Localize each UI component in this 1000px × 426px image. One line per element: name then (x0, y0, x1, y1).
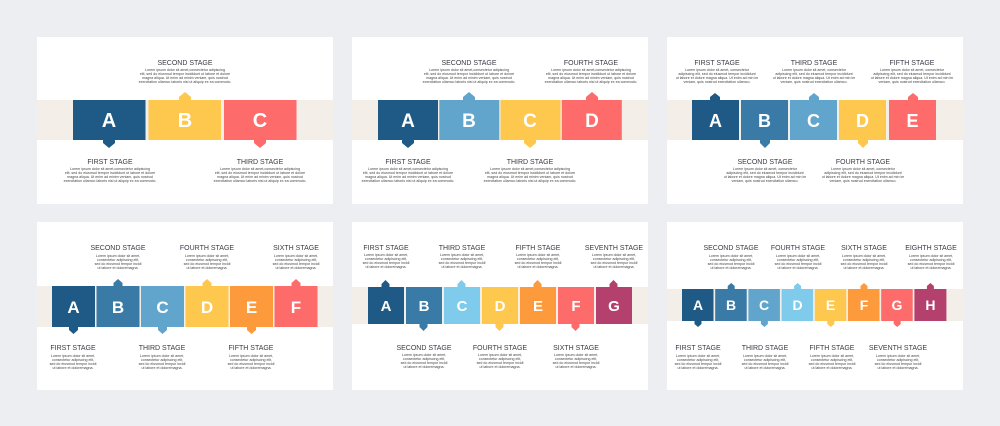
text: first stage: consectetur adipiscing elit, (52, 358, 94, 362)
text: fifth stage: adipiscing elit, sed do eiusmod tempor incididunt (873, 72, 951, 76)
text: seventh stage: sed do eiusmod tempor incidi (875, 362, 922, 366)
text: fifth stage: FIFTH STAGE (229, 345, 274, 352)
text: third stage: Lorem ipsum dolor sit amet,consectetur adipiscing (490, 167, 570, 171)
text: second stage (703, 245, 759, 270)
text: second stage: SECOND STAGE (441, 60, 497, 67)
text: first stage: Lorem ipsum dolor sit amet,consectetur adipiscing (70, 167, 150, 171)
stage D box: D (495, 298, 506, 315)
text: first stage (676, 60, 758, 84)
text: seventh stage: consectetur adipiscing elit, (593, 257, 635, 261)
stage G box (596, 280, 632, 324)
text: first stage: Lorem ipsum dolor sit amet, consectetur (685, 68, 750, 72)
text: second stage: sed do eiusmod tempor incidi (95, 262, 142, 266)
text: fifth stage (871, 60, 953, 84)
stage F box (558, 287, 594, 331)
text: fourth stage (473, 345, 527, 369)
text: second stage: consectetur adipiscing elit, (403, 357, 445, 361)
text: eighth stage: ut labore et doloremagna. (911, 266, 951, 270)
text: second stage: adipiscing elit, sed do eiusmod tempor incididunt (726, 171, 804, 175)
text: third stage: THIRD STAGE (507, 159, 554, 166)
stage A box: A (401, 111, 415, 132)
stage A box: A (709, 111, 722, 131)
text: first stage: sed do eiusmod tempor incidi (50, 362, 97, 366)
panel: 4 stages (352, 37, 648, 204)
text: fourth stage: ut labore et doloremagna. (187, 266, 227, 270)
text: second stage: sed do eiusmod tempor incidi (401, 361, 448, 365)
text: fifth stage: consectetur adipiscing elit, (517, 257, 559, 261)
stage D box (839, 100, 886, 148)
text: seventh stage: Lorem ipsum dolor sit amet, (592, 253, 636, 257)
text: sixth stage: Lorem ipsum dolor sit amet, (842, 254, 886, 258)
text: first stage: ut labore et doloremagna. (678, 366, 718, 370)
text: fifth stage: FIFTH STAGE (810, 345, 855, 352)
text: third stage: exercitation ullamco laboris nisi ut aliquip ex ea commodo. (484, 179, 576, 183)
text: fifth stage: Lorem ipsum dolor sit amet, (229, 354, 273, 358)
text: sixth stage: consectetur adipiscing elit, (275, 258, 317, 262)
text: sixth stage: consectetur adipiscing elit, (555, 357, 597, 361)
text: second stage: exercitation ullamco laboris nisi ut aliquip ex ea commodo. (139, 80, 231, 84)
text: first stage: elit, sed do eiusmod tempor incididunt ut labore et dolore (363, 171, 453, 175)
stage D box (782, 283, 813, 321)
text: second stage: Lorem ipsum dolor sit amet, (96, 254, 140, 258)
stage C box (224, 100, 296, 148)
text: second stage: SECOND STAGE (703, 245, 759, 252)
text: first stage: adipiscing elit, sed do eiusmod tempor incididunt (678, 72, 756, 76)
text: sixth stage: ut labore et doloremagna. (276, 266, 316, 270)
text: first stage: sed do eiusmod tempor incidi (363, 261, 410, 265)
text: third stage: Lorem ipsum dolor sit amet, (440, 253, 484, 257)
stage A box (368, 280, 404, 324)
text: fourth stage: consectetur adipiscing elit, (777, 258, 819, 262)
text: third stage: consectetur adipiscing elit, (744, 358, 786, 362)
stage A box: A (381, 298, 392, 315)
stage C box (748, 289, 780, 327)
text: first stage: Lorem ipsum dolor sit amet, (51, 354, 95, 358)
stage C box: C (523, 111, 537, 132)
stage E box (520, 280, 556, 324)
stage E box: E (906, 111, 919, 131)
text: first stage: magna aliqua. Ut enim ad minim veniam, quis nostrud (67, 175, 153, 179)
text: sixth stage: Lorem ipsum dolor sit amet, (274, 254, 318, 258)
text: third stage: Lorem ipsum dolor sit amet, (140, 354, 184, 358)
stage E box (230, 286, 273, 334)
text: second stage: veniam, quis nostrud exercitation ullamco. (732, 179, 798, 183)
text: second stage: magna aliqua. Ut enim ad minim veniam, quis nostrud (142, 76, 228, 80)
text: second stage (139, 60, 231, 84)
text: fifth stage: ut labore et dolore magna aliqua. Ut enim ad min im (871, 76, 953, 80)
text: fourth stage: consectetur adipiscing elit, (186, 258, 228, 262)
text: second stage: ut labore et doloremagna. (404, 365, 444, 369)
text: sixth stage: SIXTH STAGE (553, 345, 599, 352)
text: fourth stage: FOURTH STAGE (180, 245, 234, 252)
text: seventh stage (869, 345, 927, 370)
text: third stage: Lorem ipsum dolor sit amet, (743, 354, 787, 358)
text: third stage: THIRD STAGE (791, 60, 838, 67)
text: fifth stage: consectetur adipiscing elit, (811, 358, 853, 362)
stage E box: E (826, 297, 835, 313)
text: first stage: FIRST STAGE (87, 159, 133, 166)
stage D box (562, 92, 622, 140)
stage C box: C (807, 111, 820, 131)
stage A box: A (102, 110, 116, 132)
text: second stage: magna aliqua. Ut enim ad minim veniam, quis nostrud (426, 76, 512, 80)
text: eighth stage: Lorem ipsum dolor sit amet, (909, 254, 953, 258)
stage B box: B (462, 111, 476, 132)
text: third stage (773, 60, 855, 84)
text: fifth stage (228, 345, 275, 370)
stage A box: A (67, 298, 80, 317)
text: third stage: adipiscing elit, sed do eiusmod tempor incididunt (775, 72, 853, 76)
stage F box (274, 279, 318, 327)
panel: 5 stages (667, 37, 963, 204)
text: fourth stage: FOURTH STAGE (771, 245, 825, 252)
stage A box (692, 93, 739, 140)
text: fourth stage: exercitation ullamco laboris nisi ut aliquip ex ea commodo. (545, 80, 637, 84)
text: third stage (484, 159, 576, 183)
text: second stage: SECOND STAGE (157, 60, 213, 67)
text: third stage: THIRD STAGE (237, 159, 284, 166)
text: second stage: Lorem ipsum dolor sit amet, (402, 353, 446, 357)
text: third stage: THIRD STAGE (139, 345, 186, 352)
text: third stage: magna aliqua. Ut enim ad minim veniam, quis nostrud (487, 175, 573, 179)
text: first stage: FIRST STAGE (363, 245, 409, 252)
text: sixth stage: sed do eiusmod tempor incidi (553, 361, 600, 365)
text: fourth stage: ut labore et dolore magna aliqua. Ut enim ad min im (822, 175, 904, 179)
text: seventh stage: sed do eiusmod tempor incidi (591, 261, 638, 265)
text: seventh stage (585, 245, 643, 269)
stage A box (73, 100, 146, 148)
stage D box: D (201, 298, 213, 317)
text: fourth stage: adipiscing elit, sed do eiusmod tempor incididunt (824, 171, 902, 175)
stage B box: B (112, 298, 124, 317)
text: first stage: exercitation ullamco laboris nisi ut aliquip ex ea commodo. (362, 179, 454, 183)
text: third stage (214, 159, 306, 183)
text: second stage: ut labore et doloremagna. (711, 266, 751, 270)
text: second stage: sed do eiusmod tempor incidi (708, 262, 755, 266)
text: third stage: THIRD STAGE (742, 345, 789, 352)
stage B box (741, 100, 788, 148)
stage B box (406, 287, 442, 331)
text: second stage (90, 245, 146, 270)
text: first stage (64, 159, 156, 183)
text: fourth stage (545, 60, 637, 84)
stage E box: E (533, 298, 543, 315)
text: second stage: ut labore et doloremagna. (98, 266, 138, 270)
stage H box (914, 283, 946, 321)
text: fourth stage: elit, sed do eiusmod tempor incididunt ut labore et dolore (546, 72, 636, 76)
text: sixth stage: sed do eiusmod tempor incidi (273, 262, 320, 266)
text: second stage: SECOND STAGE (90, 245, 146, 252)
text: fifth stage: sed do eiusmod tempor incidi (515, 261, 562, 265)
text: seventh stage: consectetur adipiscing elit, (877, 358, 919, 362)
text: third stage: magna aliqua. Ut enim ad minim veniam, quis nostrud (217, 175, 303, 179)
stage B box: B (178, 110, 192, 132)
text: fifth stage (809, 345, 856, 370)
text: fourth stage: consectetur adipiscing elit, (479, 357, 521, 361)
stage A box (52, 286, 95, 334)
stage B box (715, 283, 747, 321)
text: first stage (675, 345, 722, 370)
text: fifth stage: ut labore et doloremagna. (231, 366, 271, 370)
text: second stage: Lorem ipsum dolor sit amet, (709, 254, 753, 258)
text: fourth stage: Lorem ipsum dolor sit amet, consectetur (831, 167, 896, 171)
text: first stage: FIRST STAGE (50, 345, 96, 352)
text: fourth stage: ut labore et doloremagna. (778, 266, 818, 270)
text: seventh stage: SEVENTH STAGE (585, 245, 643, 252)
stage F box (848, 283, 880, 321)
text: fourth stage (822, 159, 904, 183)
text: fifth stage: FIFTH STAGE (516, 245, 561, 252)
stage D box (482, 287, 518, 331)
panel: 6 stages (37, 222, 333, 390)
text: third stage: sed do eiusmod tempor incidi (139, 362, 186, 366)
text: second stage: elit, sed do eiusmod tempor incididunt ut labore et dolore (140, 72, 230, 76)
stage B box (439, 92, 499, 140)
text: third stage: elit, sed do eiusmod tempor incididunt ut labore et dolore (215, 171, 305, 175)
text: first stage (50, 345, 97, 370)
text: second stage: SECOND STAGE (737, 159, 793, 166)
text: third stage: elit, sed do eiusmod tempor incididunt ut labore et dolore (485, 171, 575, 175)
text: second stage: exercitation ullamco laboris nisi ut aliquip ex ea commodo. (423, 80, 515, 84)
text: first stage: magna aliqua. Ut enim ad minim veniam, quis nostrud (365, 175, 451, 179)
text: first stage: Lorem ipsum dolor sit amet, (676, 354, 720, 358)
text: fourth stage (771, 245, 825, 270)
text: first stage: consectetur adipiscing elit, (677, 358, 719, 362)
stage C box: C (759, 297, 769, 313)
text: third stage (439, 245, 486, 269)
text: fourth stage: Lorem ipsum dolor sit amet, (478, 353, 522, 357)
text: fourth stage: FOURTH STAGE (564, 60, 618, 67)
panel: 3 stages (37, 37, 333, 204)
stage B box: B (419, 298, 430, 315)
text: fourth stage: FOURTH STAGE (836, 159, 890, 166)
text: third stage (139, 345, 186, 370)
text: fourth stage: Lorem ipsum dolor sit amet, (776, 254, 820, 258)
text: first stage: ut labore et dolore magna aliqua. Ut enim ad min im (676, 76, 758, 80)
text: seventh stage: ut labore et doloremagna. (878, 366, 918, 370)
text: fourth stage: sed do eiusmod tempor incidi (477, 361, 524, 365)
text: third stage: ut labore et doloremagna. (142, 366, 182, 370)
text: first stage: consectetur adipiscing elit, (365, 257, 407, 261)
text: first stage: elit, sed do eiusmod tempor incididunt ut labore et dolore (65, 171, 155, 175)
text: seventh stage: Lorem ipsum dolor sit amet, (876, 354, 920, 358)
text: second stage: consectetur adipiscing elit, (710, 258, 752, 262)
text: sixth stage: ut labore et doloremagna. (556, 365, 596, 369)
text: fifth stage: sed do eiusmod tempor incidi (809, 362, 856, 366)
text: first stage: ut labore et doloremagna. (366, 265, 406, 269)
stage D box: D (585, 111, 599, 132)
text: third stage: sed do eiusmod tempor incidi (439, 261, 486, 265)
text: second stage (423, 60, 515, 84)
text: first stage: ut labore et doloremagna. (53, 366, 93, 370)
text: fifth stage: ut labore et doloremagna. (812, 366, 852, 370)
text: fourth stage: Lorem ipsum dolor sit amet,consectetur adipiscing (551, 68, 631, 72)
stage C box: C (253, 110, 267, 132)
stage B box: B (758, 111, 771, 131)
stage D box: D (792, 297, 803, 313)
text: sixth stage: ut labore et doloremagna. (844, 266, 884, 270)
stage C box: C (156, 298, 169, 317)
stage F box: F (860, 297, 869, 313)
stage A box (682, 289, 714, 327)
text: fifth stage: sed do eiusmod tempor incidi (228, 362, 275, 366)
stage C box (141, 286, 184, 334)
stage A box: A (693, 297, 703, 313)
text: first stage (362, 159, 454, 183)
text: third stage: consectetur adipiscing elit, (141, 358, 183, 362)
text: second stage: consectetur adipiscing elit, (97, 258, 139, 262)
text: third stage: ut labore et doloremagna. (442, 265, 482, 269)
panel: 8 stages (667, 222, 963, 390)
stage C box (444, 280, 480, 324)
stage G box (881, 289, 913, 327)
text: first stage: exercitation ullamco laboris nisi ut aliquip ex ea commodo. (64, 179, 156, 183)
stage B box (148, 92, 221, 140)
text: second stage: Lorem ipsum dolor sit amet,consectetur adipiscing (145, 68, 225, 72)
stage E box: E (246, 298, 257, 317)
text: eighth stage: EIGHTH STAGE (905, 245, 957, 252)
text: seventh stage: ut labore et doloremagna. (594, 265, 634, 269)
text: third stage: ut labore et dolore magna aliqua. Ut enim ad min im (773, 76, 855, 80)
stage G box: G (608, 298, 620, 315)
text: eighth stage: consectetur adipiscing elit, (910, 258, 952, 262)
stage B box (96, 279, 140, 327)
text: sixth stage (273, 245, 320, 270)
text: fourth stage: sed do eiusmod tempor incidi (775, 262, 822, 266)
text: fourth stage: FOURTH STAGE (473, 345, 527, 352)
text: sixth stage (841, 245, 888, 270)
stage D box: D (856, 111, 869, 131)
text: fifth stage: Lorem ipsum dolor sit amet, consectetur (880, 68, 945, 72)
text: third stage: THIRD STAGE (439, 245, 486, 252)
text: fourth stage: Lorem ipsum dolor sit amet, (185, 254, 229, 258)
text: third stage: Lorem ipsum dolor sit amet,consectetur adipiscing (220, 167, 300, 171)
text: fifth stage: veniam, quis nostrud exercitation ullamco. (879, 80, 945, 84)
stage E box (889, 93, 936, 140)
stage C box (500, 100, 560, 148)
text: seventh stage: SEVENTH STAGE (869, 345, 927, 352)
text: third stage: ut labore et doloremagna. (745, 366, 785, 370)
text: fifth stage: ut labore et doloremagna. (518, 265, 558, 269)
text: first stage: sed do eiusmod tempor incidi (675, 362, 722, 366)
stage C box: C (457, 298, 468, 315)
text: fifth stage: Lorem ipsum dolor sit amet, (810, 354, 854, 358)
stage B box: B (726, 297, 736, 313)
text: fourth stage: veniam, quis nostrud exercitation ullamco. (830, 179, 896, 183)
text: third stage (742, 345, 789, 370)
text: sixth stage: Lorem ipsum dolor sit amet, (554, 353, 598, 357)
text: first stage: FIRST STAGE (385, 159, 431, 166)
text: third stage: sed do eiusmod tempor incidi (742, 362, 789, 366)
text: sixth stage: sed do eiusmod tempor incidi (841, 262, 888, 266)
stage H box: H (925, 297, 935, 313)
text: first stage: FIRST STAGE (694, 60, 740, 67)
text: fifth stage (515, 245, 562, 269)
text: second stage: ut labore et dolore magna aliqua. Ut enim ad min im (724, 175, 806, 179)
text: fifth stage: FIFTH STAGE (890, 60, 935, 67)
stage C box (790, 93, 837, 140)
text: first stage: veniam, quis nostrud exercitation ullamco. (684, 80, 750, 84)
text: third stage: veniam, quis nostrud exercitation ullamco. (781, 80, 847, 84)
text: first stage: FIRST STAGE (675, 345, 721, 352)
stage A box (378, 100, 438, 148)
text: eighth stage (905, 245, 957, 270)
text: first stage: Lorem ipsum dolor sit amet,consectetur adipiscing (368, 167, 448, 171)
text: sixth stage: SIXTH STAGE (841, 245, 887, 252)
stage E box (815, 289, 846, 327)
text: fourth stage: sed do eiusmod tempor incidi (184, 262, 231, 266)
text: fourth stage (180, 245, 234, 270)
text: first stage: Lorem ipsum dolor sit amet, (364, 253, 408, 257)
text: second stage (724, 159, 806, 183)
panel: 7 stages (352, 222, 648, 390)
text: second stage: Lorem ipsum dolor sit amet, consectetur (733, 167, 798, 171)
text: fifth stage: Lorem ipsum dolor sit amet, (516, 253, 560, 257)
text: first stage (363, 245, 410, 269)
text: third stage: Lorem ipsum dolor sit amet, consectetur (782, 68, 847, 72)
text: fourth stage: ut labore et doloremagna. (480, 365, 520, 369)
text: fourth stage: magna aliqua. Ut enim ad minim veniam, quis nostrud (548, 76, 634, 80)
stage D box (186, 279, 228, 327)
text: sixth stage: SIXTH STAGE (273, 245, 319, 252)
stage F box: F (571, 298, 581, 315)
text: sixth stage: consectetur adipiscing elit, (843, 258, 885, 262)
text: sixth stage (553, 345, 600, 369)
text: second stage: Lorem ipsum dolor sit amet,consectetur adipiscing (429, 68, 509, 72)
text: eighth stage: sed do eiusmod tempor incidi (908, 262, 955, 266)
text: fifth stage: consectetur adipiscing elit, (230, 358, 272, 362)
text: second stage (396, 345, 452, 369)
stage G box: G (892, 297, 903, 313)
text: second stage: SECOND STAGE (396, 345, 452, 352)
text: third stage: consectetur adipiscing elit, (441, 257, 483, 261)
stage F box: F (291, 298, 301, 317)
text: third stage: exercitation ullamco laboris nisi ut aliquip ex ea commodo. (214, 179, 306, 183)
text: second stage: elit, sed do eiusmod tempor incididunt ut labore et dolore (424, 72, 514, 76)
